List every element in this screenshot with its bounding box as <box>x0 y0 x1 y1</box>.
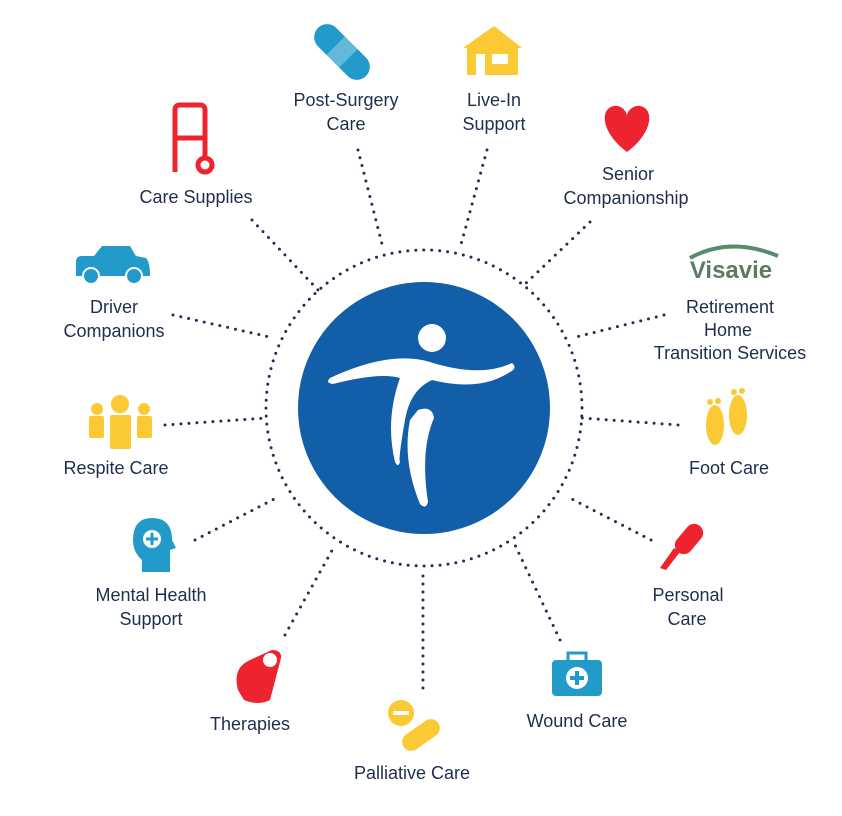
label: retirement <box>654 297 806 363</box>
label: mental health: Mental Health <box>95 585 207 605</box>
label: personal care: Personal <box>652 585 724 605</box>
label: live-in: Live-In <box>467 90 521 110</box>
label: retirement: Retirement <box>686 297 774 317</box>
label: wound care: Wound Care <box>527 711 627 731</box>
label: senior companionship <box>563 164 689 208</box>
label: mental health: Support <box>119 609 183 629</box>
label: palliative care: Palliative Care <box>354 763 470 783</box>
icon: hand <box>236 650 281 703</box>
icon: walker <box>175 105 212 172</box>
label care: Care <box>326 114 366 134</box>
label: foot care: Foot Care <box>689 458 769 478</box>
label: therapies: Therapies <box>210 714 290 734</box>
label: driver: Companions <box>63 321 165 341</box>
label: retirement: Transition Services <box>654 343 806 363</box>
label: respite: Respite Care <box>63 458 169 478</box>
center logo <box>298 282 550 534</box>
label: driver <box>63 297 165 341</box>
visavie logo: Visavie <box>690 257 772 284</box>
dotted ring and spokes <box>165 150 678 688</box>
label: senior companionship: Companionship <box>563 188 689 208</box>
icon: pills <box>388 700 443 754</box>
icon: car <box>76 246 150 284</box>
icon: feet <box>706 388 747 445</box>
icon: first aid kit <box>552 653 602 696</box>
label: post-surgery: Post-Surgery <box>293 90 399 110</box>
label: senior companionship: Senior <box>602 164 654 184</box>
label: care supplies: Care Supplies <box>139 187 253 207</box>
icon: brush <box>660 520 707 570</box>
label: mental health <box>95 585 207 629</box>
icon: head <box>133 518 176 572</box>
label: personal care <box>652 585 724 629</box>
label: personal care: Care <box>667 609 707 629</box>
label: retirement: Home <box>704 320 752 340</box>
icon: heart <box>605 106 649 152</box>
label support: Support <box>462 114 526 134</box>
icon: house <box>463 26 522 75</box>
visavie logo <box>690 246 778 284</box>
icon: bandage <box>309 19 375 85</box>
label: driver: Driver <box>90 297 138 317</box>
icon: people <box>89 395 152 449</box>
